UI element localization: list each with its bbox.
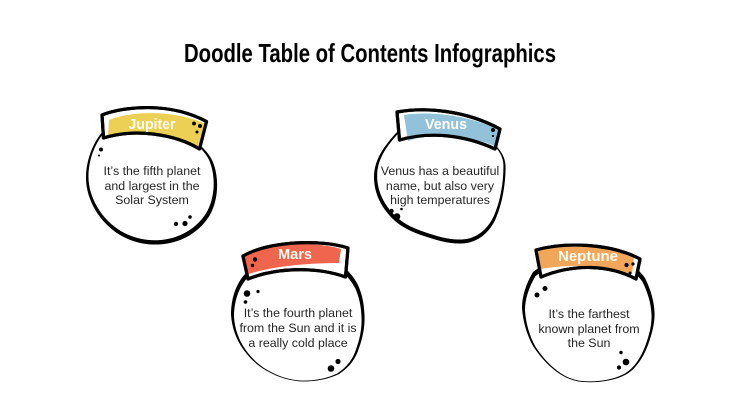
dots: Venus <box>389 208 403 220</box>
text: Mars <box>239 306 357 350</box>
blob outline: Mars <box>231 257 365 382</box>
panel: Jupiter <box>86 108 217 245</box>
text: Neptune: It’s the farthest <box>548 307 630 321</box>
blob outline: Jupiter <box>86 125 217 245</box>
text: Venus: name, but also very <box>386 179 495 193</box>
ribbon: Jupiter: Jupiter <box>128 117 176 133</box>
text: Mars: from the Sun and it is <box>239 321 357 335</box>
blob outline: Venus <box>374 122 506 244</box>
text: Jupiter: and largest in the <box>104 179 200 193</box>
dots: Neptune <box>534 286 629 370</box>
text: Jupiter: It’s the fifth planet <box>104 164 201 178</box>
text: Neptune <box>538 307 640 350</box>
dots: Jupiter <box>98 148 192 226</box>
ribbon: Neptune: Neptune <box>558 249 618 265</box>
panel: Mars <box>231 243 365 382</box>
text: Neptune: known planet from <box>538 322 640 336</box>
blob outline: Neptune <box>522 257 655 382</box>
text: Venus: high temperatures <box>390 193 490 207</box>
panel: Neptune <box>522 245 655 382</box>
dots: Mars <box>244 290 341 372</box>
text: Neptune: the Sun <box>568 336 610 350</box>
text: Jupiter <box>104 164 201 207</box>
text: Venus <box>381 164 499 207</box>
text: Venus: Venus has a beautiful <box>381 164 499 178</box>
text: Jupiter: Solar System <box>115 193 189 207</box>
ribbon: Mars: Mars <box>278 247 312 263</box>
panel: Venus <box>374 110 506 244</box>
text: Mars: It’s the fourth planet <box>244 306 353 320</box>
text: Mars: a really cold place <box>248 336 348 350</box>
title: Doodle Table of Contents Infographics <box>184 38 556 68</box>
ribbon: Venus: Venus <box>425 117 467 133</box>
